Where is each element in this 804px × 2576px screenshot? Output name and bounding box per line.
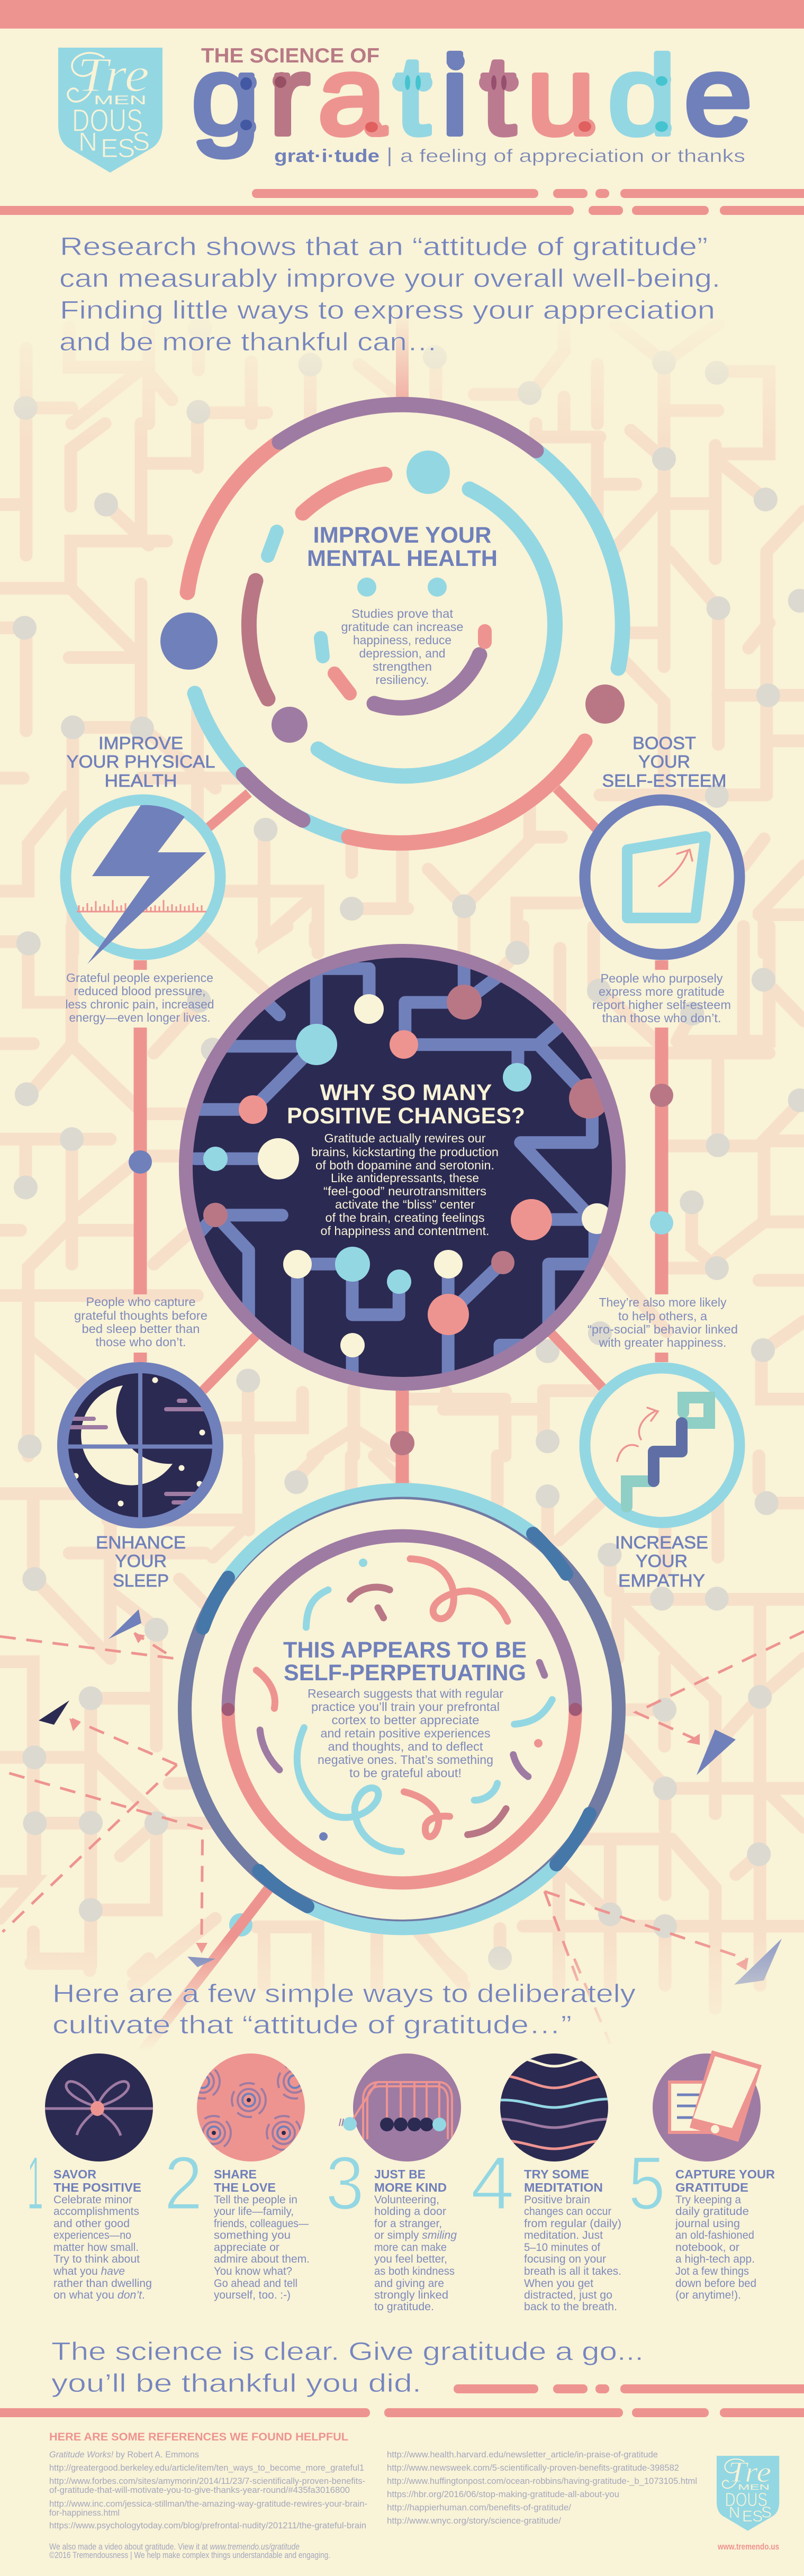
text: journal using bbox=[675, 2218, 740, 2230]
heading: SAVOR bbox=[53, 2167, 96, 2181]
body text: activate the “bliss” center bbox=[335, 1197, 475, 1211]
heading: THE LOVE bbox=[214, 2181, 276, 2194]
heading bbox=[524, 2167, 603, 2194]
label: boost your self-esteem: SELF-ESTEEM bbox=[602, 771, 726, 790]
heading: MEDITATION bbox=[524, 2181, 603, 2194]
inner ring bbox=[221, 1536, 582, 1883]
body text: resiliency. bbox=[376, 673, 429, 687]
text bbox=[214, 2194, 310, 2301]
text: focusing on your bbox=[524, 2253, 606, 2265]
text: on what you don’t. bbox=[53, 2289, 145, 2301]
text: sleep: bed sleep better than bbox=[82, 1322, 200, 1336]
text: sleep: those who don’t. bbox=[95, 1335, 186, 1349]
body text bbox=[308, 1687, 503, 1780]
heading: WHY SO MANY bbox=[320, 1080, 492, 1105]
body text: brains, kickstarting the production bbox=[311, 1145, 499, 1159]
body text bbox=[311, 1131, 499, 1238]
label: improve your physical health: HEALTH bbox=[105, 771, 177, 790]
heading: SELF-PERPETUATING bbox=[284, 1660, 526, 1686]
definition bbox=[274, 145, 745, 167]
label: increase your empathy bbox=[615, 1533, 708, 1590]
text: meditation. Just bbox=[524, 2229, 603, 2241]
text: for a stranger, bbox=[374, 2218, 442, 2230]
text: empathy: to help others, a bbox=[618, 1309, 707, 1323]
fade overlays bbox=[0, 310, 804, 2369]
references left column: http://www.inc.com/jessica-stillman/the-amazing-way-gratitude-rewires-your-brain- bbox=[49, 2499, 367, 2509]
inner ring bbox=[249, 474, 555, 776]
text: holding a door bbox=[374, 2205, 446, 2218]
text: distracted, just go bbox=[524, 2289, 612, 2301]
step 3: just be more kind bbox=[326, 2053, 461, 2313]
text: physical health: energy—even longer lives. bbox=[69, 1011, 211, 1024]
icon: empathy steps in circle bbox=[585, 1368, 739, 1523]
text: an old-fashioned bbox=[675, 2229, 754, 2241]
text: appreciate or bbox=[214, 2241, 279, 2254]
label: boost your self-esteem: YOUR bbox=[638, 752, 690, 771]
label: improve your physical health: YOUR PHYSICAL bbox=[67, 752, 215, 771]
icon: ripples bbox=[197, 2053, 305, 2161]
background circuit pattern bbox=[0, 324, 804, 2008]
label: improve your physical health: IMPROVE bbox=[98, 733, 183, 753]
text: self-esteem: report higher self-esteem bbox=[592, 998, 731, 1012]
title: the science of gratitude bbox=[192, 33, 752, 167]
text: as both kindness bbox=[374, 2265, 455, 2277]
icon: breath waves bbox=[500, 2053, 609, 2161]
step 1: savor the positive bbox=[27, 2053, 153, 2301]
header bar top bbox=[0, 0, 804, 29]
references left column: of-gratitude-that-will-motivate-you-to-give-thanks-year-round/#435fa3016800 bbox=[49, 2485, 350, 2495]
confetti squiggles bbox=[256, 1559, 552, 1852]
closing statement bbox=[51, 2338, 644, 2398]
intro text: and be more thankful can… bbox=[59, 328, 438, 356]
body text: Gratitude actually rewires our bbox=[324, 1131, 486, 1145]
references left column bbox=[49, 2449, 367, 2530]
text: friends, colleagues— bbox=[214, 2218, 309, 2230]
small logo shield: NESS bbox=[729, 2503, 772, 2525]
outer ring bbox=[185, 1490, 619, 1928]
text: Celebrate minor bbox=[53, 2194, 132, 2206]
references right column: http://www.health.harvard.edu/newsletter_article/in-praise-of-gratitude bbox=[387, 2449, 658, 2460]
references left column: http://greatergood.berkeley.edu/article/item/ten_ways_to_become_more_grateful1 bbox=[49, 2463, 364, 2473]
text: self-esteem: People who purposely bbox=[600, 971, 723, 985]
heading: JUST BE bbox=[374, 2167, 426, 2181]
heading bbox=[53, 2167, 141, 2194]
closing statement: you’ll be thankful you did. bbox=[51, 2370, 421, 2398]
heading: MORE KIND bbox=[374, 2181, 447, 2194]
heading: TRY SOME bbox=[524, 2167, 589, 2181]
references heading: HERE ARE SOME REFERENCES WE FOUND HELPFUL bbox=[49, 2431, 348, 2443]
body text: of the brain, creating feelings bbox=[325, 1211, 485, 1224]
label: increase your empathy: EMPATHY bbox=[618, 1571, 705, 1590]
text: and other good bbox=[53, 2218, 130, 2230]
label: increase your empathy: INCREASE bbox=[615, 1533, 708, 1552]
logo shield: NESS bbox=[78, 127, 150, 163]
footer credits: We also made a video about gratitude. View it at www.tremendo.us/gratitude bbox=[49, 2542, 300, 2552]
logo shield: MEN bbox=[94, 93, 147, 107]
text: self-esteem bbox=[592, 971, 731, 1025]
website url: www.tremendo.us bbox=[717, 2542, 779, 2552]
text bbox=[374, 2194, 457, 2313]
text: sleep: grateful thoughts before bbox=[74, 1309, 207, 1322]
references right column: http://www.newsweek.com/5-scientifically-proven-benefits-gratitude-398582 bbox=[387, 2463, 679, 2473]
body text: and retain positive experiences bbox=[321, 1726, 490, 1740]
text: (or anytime!). bbox=[675, 2289, 741, 2301]
text: 5–10 minutes of bbox=[524, 2241, 600, 2254]
pink connector lines behind circles bbox=[141, 312, 402, 2054]
intro text: Finding little ways to express your appreciation bbox=[60, 296, 715, 325]
references left column: https://www.psychologytoday.com/blog/prefrontal-nudity/201211/the-grateful-brain bbox=[49, 2520, 366, 2530]
references right column: https://hbr.org/2016/06/stop-making-gratitude-all-about-you bbox=[387, 2489, 619, 2499]
panel: why so many positive changes bbox=[186, 951, 619, 1384]
header divider bars bbox=[0, 189, 804, 215]
heading bbox=[307, 523, 498, 571]
references left column: http://www.forbes.com/sites/amymorin/2014/11/23/7-scientifically-proven-benefits- bbox=[49, 2476, 365, 2486]
text: a high-tech app. bbox=[675, 2253, 755, 2265]
intro text: can measurably improve your overall well-being. bbox=[59, 265, 720, 293]
connectors between circles bbox=[140, 788, 662, 1486]
text: rather than dwelling bbox=[53, 2277, 152, 2290]
text bbox=[675, 2194, 756, 2301]
body text: and thoughts, and to deflect bbox=[328, 1740, 483, 1753]
text: physical health bbox=[66, 971, 214, 1024]
text: yourself, too. :-) bbox=[214, 2289, 291, 2301]
body text: practice you’ll train your prefrontal bbox=[311, 1700, 500, 1714]
dashed arrows and paper planes bbox=[0, 1609, 804, 2044]
text: back to the breath. bbox=[524, 2301, 617, 2313]
text: Tell the people in bbox=[214, 2194, 297, 2206]
text: self-esteem: express more gratitude bbox=[599, 985, 725, 998]
connector dot bbox=[390, 1431, 414, 1455]
text: experiences—no bbox=[53, 2229, 131, 2241]
connector dots bbox=[129, 1084, 673, 1235]
references left column: Gratitude Works! by Robert A. Emmons bbox=[49, 2449, 199, 2460]
references right column bbox=[387, 2449, 697, 2526]
text: Volunteering, bbox=[374, 2194, 439, 2206]
small logo shield: DOUS bbox=[725, 2489, 767, 2510]
heading: GRATITUDE bbox=[675, 2181, 748, 2194]
small logo shield: MEN bbox=[738, 2483, 770, 2492]
text: to gratitude. bbox=[374, 2301, 434, 2313]
label: enhance your sleep bbox=[96, 1533, 186, 1590]
text: admire about them. bbox=[214, 2253, 310, 2265]
circuit nodes bbox=[203, 985, 612, 1357]
text bbox=[53, 2194, 152, 2301]
label: enhance your sleep: YOUR bbox=[115, 1551, 167, 1571]
body text bbox=[341, 607, 464, 687]
references left column: for-happiness.html bbox=[49, 2508, 120, 2518]
text: strongly linked bbox=[374, 2289, 448, 2301]
circuit lines bbox=[195, 960, 612, 1379]
step 1: savor the positive: 1 bbox=[27, 2141, 43, 2226]
text: self-esteem: than those who don’t. bbox=[602, 1011, 721, 1025]
text: and giving are bbox=[374, 2277, 444, 2290]
icon: newton's cradle bbox=[339, 2053, 461, 2161]
intro text bbox=[59, 233, 720, 356]
body text: Like antidepressants, these bbox=[331, 1171, 479, 1185]
word gratitude: gratitude bbox=[192, 33, 752, 158]
body text: to be grateful about! bbox=[349, 1766, 462, 1780]
step 5: capture your gratitude bbox=[628, 2050, 775, 2301]
text: empathy bbox=[588, 1295, 738, 1349]
number: 4 bbox=[471, 2141, 514, 2226]
body text: Research suggests that with regular bbox=[308, 1687, 503, 1700]
text: something you bbox=[214, 2229, 291, 2241]
section heading: simple ways bbox=[52, 1980, 636, 2039]
definition: a feeling of appreciation or thanks bbox=[400, 146, 745, 166]
logo shield: Tre bbox=[77, 48, 149, 102]
references right column: http://www.wnyc.org/story/science-gratitude/ bbox=[387, 2516, 561, 2526]
heading: THE POSITIVE bbox=[53, 2181, 141, 2194]
small logo shield bbox=[717, 2456, 779, 2531]
ring dots bbox=[160, 451, 625, 743]
text: physical health: reduced blood pressure, bbox=[74, 984, 205, 998]
body text: happiness, reduce bbox=[353, 633, 451, 647]
number: 2 bbox=[164, 2141, 203, 2226]
body text: depression, and bbox=[359, 646, 446, 660]
text: Positive brain bbox=[524, 2194, 590, 2206]
text: or simply smiling bbox=[374, 2229, 457, 2241]
text: empathy: They’re also more likely bbox=[599, 1295, 727, 1309]
heading bbox=[374, 2167, 447, 2194]
body text: of happiness and contentment. bbox=[321, 1224, 489, 1238]
kicker: THE SCIENCE OF bbox=[201, 44, 380, 67]
body text: Studies prove that bbox=[351, 607, 454, 620]
text: You know what? bbox=[214, 2265, 292, 2277]
text: changes can occur bbox=[524, 2205, 611, 2218]
label: improve your physical health bbox=[67, 733, 215, 790]
step 2: share the love bbox=[164, 2053, 312, 2301]
heading: SHARE bbox=[214, 2167, 257, 2181]
text: When you get bbox=[524, 2277, 593, 2290]
label: increase your empathy: YOUR bbox=[636, 1551, 688, 1571]
body text: cortex to better appreciate bbox=[331, 1713, 480, 1727]
text: you feel better, bbox=[374, 2253, 447, 2265]
heading: CAPTURE YOUR bbox=[675, 2167, 775, 2181]
text: notebook, or bbox=[675, 2241, 739, 2254]
text: down before bed bbox=[675, 2277, 756, 2290]
references right column: http://happierhuman.com/benefits-of-gratitude/ bbox=[387, 2502, 571, 2512]
text: breath is all it takes. bbox=[524, 2265, 621, 2277]
heading bbox=[283, 1637, 527, 1686]
text: matter how small. bbox=[53, 2241, 139, 2254]
logo shield: DOUS bbox=[72, 103, 143, 138]
text: empathy: with greater happiness. bbox=[598, 1336, 726, 1349]
small logo shield: Tre bbox=[728, 2456, 771, 2488]
section heading: simple ways: cultivate that “attitude of gratitude…” bbox=[52, 2011, 572, 2039]
body text: strengthen bbox=[373, 660, 432, 673]
closing statement: The science is clear. Give gratitude a go... bbox=[51, 2338, 644, 2366]
text: Try keeping a bbox=[675, 2194, 741, 2206]
label: boost your self-esteem bbox=[602, 733, 726, 790]
number: 3 bbox=[326, 2141, 364, 2226]
purple ring bbox=[186, 951, 619, 1384]
section heading: simple ways: Here are a few simple ways to deliberately bbox=[52, 1980, 636, 2008]
footer credits bbox=[49, 2542, 330, 2560]
icon: moon in circle bbox=[58, 1366, 222, 1525]
heading bbox=[287, 1080, 525, 1129]
intro text: Research shows that an “attitude of gratitude” bbox=[60, 233, 708, 261]
panel: this appears to be self-perpetuating bbox=[185, 1490, 619, 1928]
heading: THIS APPEARS TO BE bbox=[283, 1637, 527, 1663]
label: enhance your sleep: SLEEP bbox=[113, 1571, 169, 1590]
heading bbox=[675, 2167, 775, 2194]
body text: negative ones. That’s something bbox=[318, 1753, 493, 1767]
text bbox=[524, 2194, 621, 2313]
text: sleep bbox=[74, 1295, 207, 1349]
icon: notebook and phone bbox=[653, 2050, 762, 2161]
outer ring bbox=[187, 404, 622, 843]
text: Jot a few things bbox=[675, 2265, 749, 2277]
footer credits: ©2016 Tremendousness | We help make complex things understandable and engaging. bbox=[49, 2550, 330, 2560]
heading: POSITIVE CHANGES? bbox=[287, 1103, 525, 1129]
definition: | bbox=[387, 145, 392, 167]
references right column: http://www.huffingtonpost.com/ocean-robbins/having-gratitude-_b_1073105.html bbox=[387, 2476, 697, 2486]
heading: MENTAL HEALTH bbox=[307, 546, 498, 571]
text: accomplishments bbox=[53, 2205, 139, 2218]
text: daily gratitude bbox=[675, 2205, 749, 2218]
letter accents bbox=[239, 52, 672, 137]
definition: grat·i·tude bbox=[274, 146, 380, 166]
label: boost your self-esteem: BOOST bbox=[633, 733, 696, 753]
heading: IMPROVE YOUR bbox=[313, 523, 491, 548]
text: Try to think about bbox=[53, 2253, 140, 2265]
logo shield bbox=[58, 48, 162, 173]
step 4: try some meditation bbox=[471, 2053, 621, 2313]
text: from regular (daily) bbox=[524, 2218, 621, 2230]
icon: self-esteem frame in circle bbox=[585, 800, 739, 954]
icon: bow bbox=[45, 2053, 153, 2161]
text: your life—family, bbox=[214, 2205, 294, 2218]
panel: improve your mental health bbox=[160, 404, 625, 843]
text: empathy: “pro-social” behavior linked bbox=[588, 1322, 738, 1336]
text: sleep: People who capture bbox=[86, 1295, 196, 1309]
text: what you have bbox=[53, 2265, 125, 2277]
text: Go ahead and tell bbox=[214, 2277, 297, 2290]
body text: “feel-good” neurotransmitters bbox=[323, 1184, 486, 1198]
body text: of both dopamine and serotonin. bbox=[315, 1158, 494, 1172]
icon: lightning bolt in circle bbox=[66, 800, 220, 964]
footer divider bars bbox=[0, 2384, 804, 2417]
label: enhance your sleep: ENHANCE bbox=[96, 1533, 186, 1552]
heading bbox=[214, 2167, 276, 2194]
text: more can make bbox=[374, 2241, 447, 2254]
body text: gratitude can increase bbox=[341, 620, 464, 634]
text: physical health: Grateful people experience bbox=[66, 971, 213, 985]
number: 5 bbox=[628, 2141, 665, 2226]
text: physical health: less chronic pain, increased bbox=[66, 997, 214, 1011]
